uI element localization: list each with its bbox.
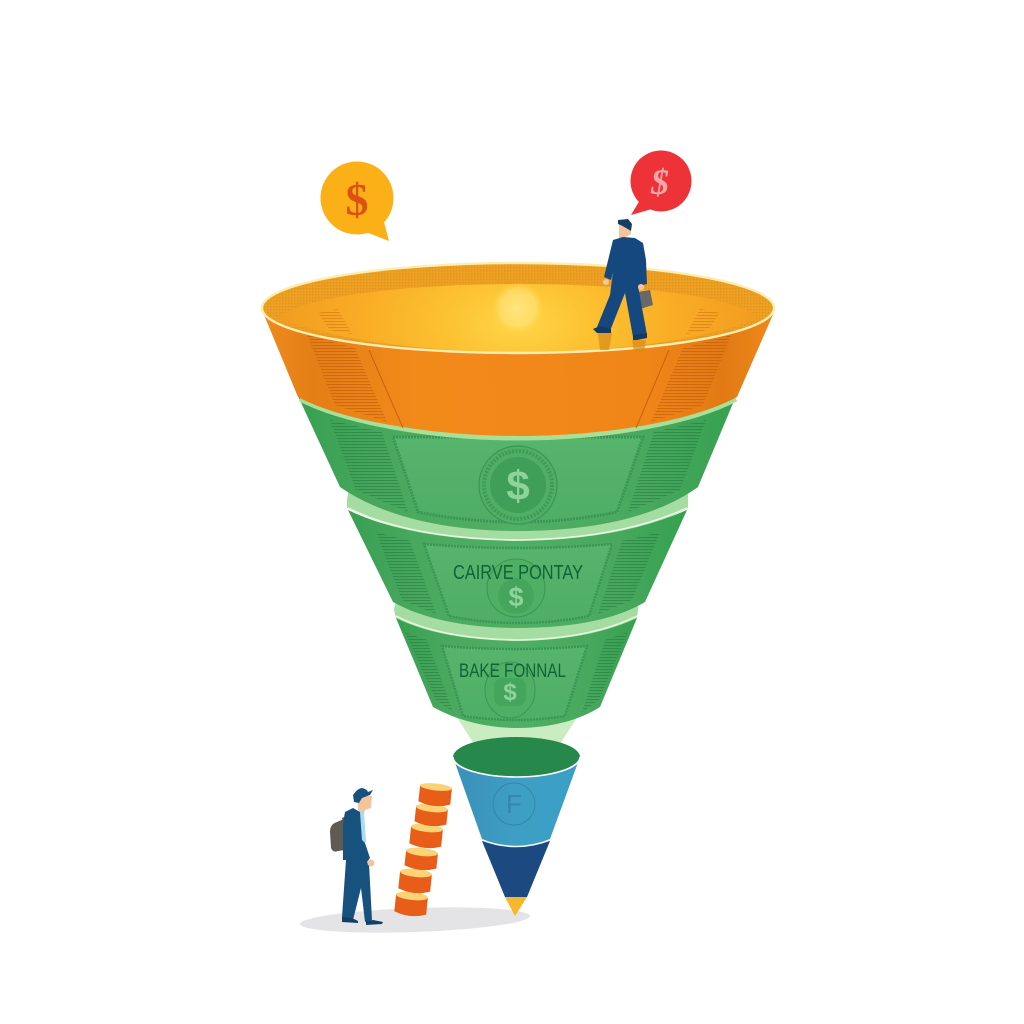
speech bubble: red dollar [630, 150, 692, 215]
rim line [262, 263, 774, 353]
head [619, 224, 631, 242]
coin 4 [404, 846, 438, 872]
coin stack [394, 782, 452, 918]
coin 5 [398, 867, 432, 895]
banknote panel [442, 646, 587, 720]
backpack [330, 818, 346, 852]
speech bubble: red dollar: $ [650, 162, 669, 202]
suit [597, 237, 647, 337]
light neck below green funnel [456, 716, 578, 750]
rim opening [453, 737, 580, 777]
shoes [342, 917, 383, 925]
shoes [593, 326, 647, 340]
bowl interior rim band [262, 263, 774, 353]
side text hatch [307, 335, 387, 422]
shirt [358, 811, 366, 846]
funnel tier: upper green band [298, 396, 736, 531]
coin 3 [409, 822, 443, 850]
small funnel cone [453, 737, 580, 916]
hands [603, 279, 609, 285]
label: CAIRVE PONTAY [453, 562, 583, 584]
coin 1 [418, 782, 452, 808]
yellow tip [505, 897, 527, 916]
funnel tier: orange top bowl [262, 263, 775, 438]
sun glow [492, 282, 544, 334]
side text hatch [376, 532, 436, 614]
inner side text marks [318, 309, 352, 334]
navy section [482, 841, 550, 897]
ground shadow [300, 904, 530, 936]
side text hatch [330, 420, 408, 512]
suit [342, 808, 372, 922]
funnel tier: middle green band [347, 485, 688, 628]
F seal [493, 783, 535, 825]
coin 6 [394, 890, 428, 918]
seal: $ [503, 679, 517, 706]
label: BAKE FONNAL [459, 661, 566, 682]
seal [479, 446, 557, 524]
side text hatch [405, 632, 453, 712]
head [358, 796, 372, 814]
seal: $ [508, 582, 524, 612]
reflection [598, 333, 646, 352]
cap [353, 788, 373, 803]
seal [485, 662, 535, 718]
banknote panel [424, 544, 612, 623]
bowl interior [278, 284, 758, 352]
speech bubble: yellow dollar: $ [346, 174, 368, 225]
blue section [453, 757, 580, 846]
banknote panel [393, 437, 643, 522]
man walking with briefcase [593, 219, 653, 352]
seal [487, 559, 545, 617]
man with backpack [330, 788, 383, 925]
briefcase [637, 290, 653, 309]
collar [620, 238, 629, 242]
hand [368, 860, 374, 866]
F seal: F [506, 789, 522, 819]
coin 2 [414, 802, 448, 828]
speech bubble: yellow dollar [320, 162, 394, 241]
funnel tier: lower green band [394, 596, 638, 728]
seal: $ [506, 462, 530, 509]
